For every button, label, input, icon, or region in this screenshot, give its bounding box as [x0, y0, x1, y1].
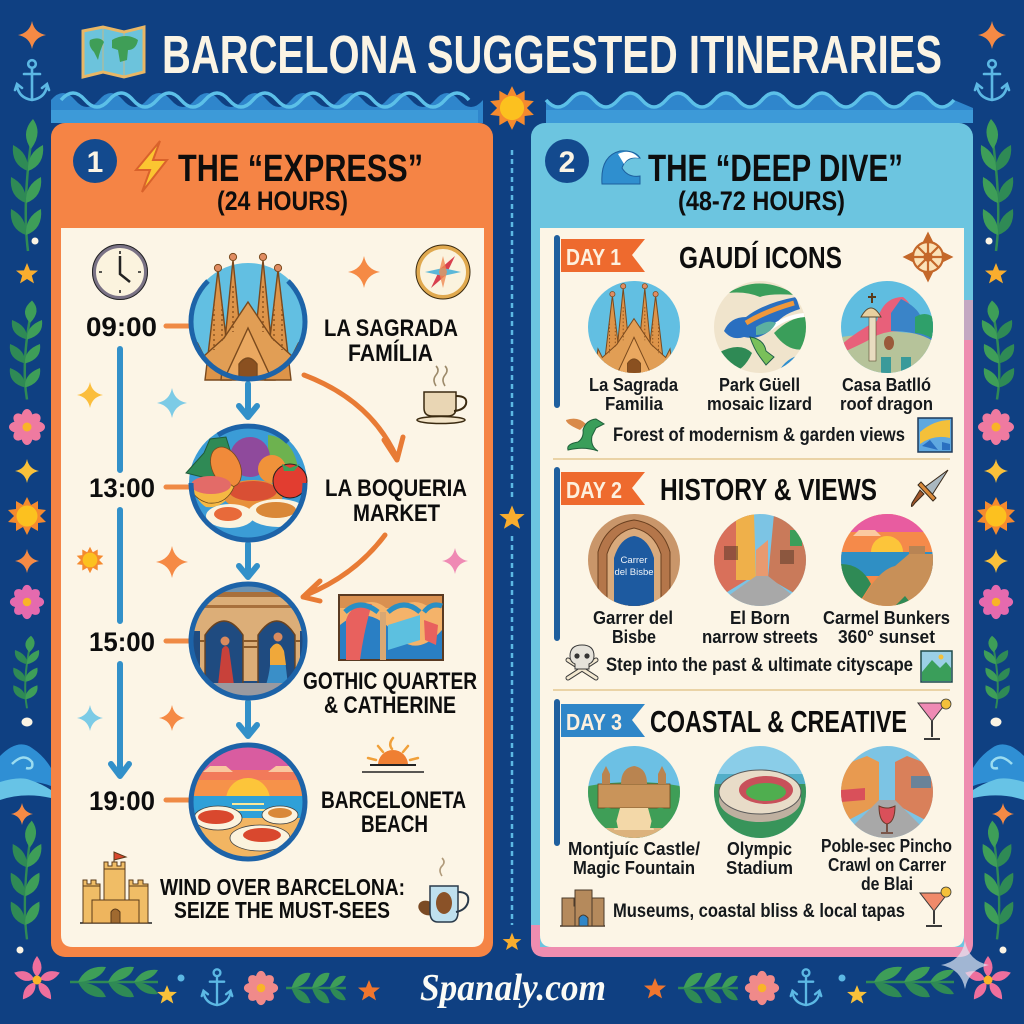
day 3 heading: COASTAL & CREATIVE [650, 704, 907, 739]
day 2 ribbon [561, 472, 645, 505]
icon: clock [92, 244, 148, 300]
casa batllo thumbnail [841, 281, 933, 373]
connector dashes [166, 326, 189, 800]
icon: dagger [911, 470, 948, 506]
day 1 ribbon [561, 239, 645, 272]
badge 1 [73, 139, 117, 183]
day 3 ribbon: DAY 3 [566, 709, 622, 735]
icon: ship wheel [905, 234, 951, 280]
badge 2 [545, 139, 589, 183]
icon: skull and crossbones [568, 645, 596, 678]
day poles [554, 238, 560, 843]
badge 2: 2 [559, 146, 575, 179]
time: 19:00: 19:00 [89, 786, 155, 816]
stop circle: barceloneta beach [188, 742, 308, 862]
label: gothic quarter: GOTHIC QUARTER [303, 668, 477, 695]
day 1 labels: Familia [605, 394, 664, 414]
icon: coffee cup [417, 366, 466, 424]
carrer del bisbe thumbnail [588, 514, 680, 606]
day 3 summary: Museums, coastal bliss & local tapas [613, 901, 905, 922]
left border decorations [0, 21, 51, 954]
day 2 labels: El Born [730, 608, 790, 628]
icon: landscape [921, 651, 952, 682]
day 1 labels: mosaic lizard [707, 394, 812, 414]
badge 1: 1 [87, 146, 103, 179]
day 2 labels: 360° sunset [838, 627, 935, 647]
day 3 labels: de Blai [861, 874, 913, 894]
day 3 labels: Magic Fountain [573, 858, 695, 878]
day 1 labels: roof dragon [840, 394, 933, 414]
wave band right [546, 93, 973, 123]
center dashed divider [511, 150, 513, 925]
label: la boqueria market: MARKET [353, 500, 440, 527]
closing text: wind over barcelona: SEIZE THE MUST-SEES [174, 897, 390, 923]
label: gothic quarter: & CATHERINE [324, 692, 456, 719]
day 3 labels: Olympic [727, 839, 792, 859]
icon: lower center star [503, 933, 521, 950]
orange route arrow 2 [303, 535, 385, 601]
time: 13:00: 13:00 [89, 473, 155, 503]
bottom border decorations right [644, 941, 1012, 1005]
icon: compass [416, 245, 470, 299]
day 2 labels: Garrer del [593, 608, 673, 628]
panel: the express [51, 123, 493, 957]
icon: sandcastle [80, 852, 152, 923]
icon: dragon [566, 419, 604, 451]
day 1 labels: La Sagrada [589, 375, 679, 395]
day 1 heading: GAUDÍ ICONS [679, 240, 842, 275]
label: la boqueria market [325, 475, 467, 527]
carrer del bisbe thumbnail: del Bisbe [614, 567, 654, 578]
panel subheading: 24 hours: (24 HOURS) [217, 186, 348, 216]
label: barceloneta beach [321, 787, 466, 838]
sagrada thumbnail [588, 281, 680, 378]
icon: sunset [362, 738, 424, 772]
day 1 summary: Forest of modernism & garden views [613, 425, 905, 446]
day 2 labels: Bisbe [612, 627, 656, 647]
day 3 labels: Stadium [726, 858, 793, 878]
day 3 labels: Crawl on Carrer [828, 855, 946, 875]
icon: lightning bolt [136, 141, 167, 192]
label: la sagrada familia [324, 315, 458, 367]
day 1 labels: Park Güell [719, 375, 800, 395]
icon: castle [560, 890, 605, 926]
carrer del bisbe thumbnail: Carrer [621, 555, 647, 566]
time: 09:00: 09:00 [86, 312, 157, 342]
carmel bunkers thumbnail [841, 514, 933, 606]
label: gothic quarter [303, 668, 477, 719]
bottom border decorations left [13, 956, 380, 1005]
icon: coffee mug and bean [416, 858, 468, 922]
stop circle: boqueria market [186, 424, 308, 542]
day 2 heading: HISTORY & VIEWS [660, 472, 877, 507]
day 3 labels: Poble-sec Pincho [821, 836, 952, 856]
time: 15:00: 15:00 [89, 627, 155, 657]
band lower strip [51, 110, 973, 123]
poble-sec thumbnail [841, 746, 933, 838]
day dividers [553, 459, 950, 690]
panel heading: the express: THE “EXPRESS” [178, 148, 423, 190]
panel heading: the deep dive: THE “DEEP DIVE” [648, 148, 903, 190]
olympic stadium thumbnail [714, 746, 806, 838]
day 2 labels [593, 608, 950, 647]
icon: cocktail bottom [920, 887, 951, 926]
stop circle: sagrada familia [189, 253, 307, 384]
day 3 labels: Montjuíc Castle/ [568, 839, 700, 859]
label: la sagrada familia: LA SAGRADA [324, 315, 458, 342]
right border decorations [973, 21, 1024, 954]
stop circle: gothic quarter [188, 581, 308, 703]
stop arrows [239, 384, 257, 736]
icon: mosaic tile [918, 418, 952, 452]
decor sparkles [77, 382, 468, 731]
wave highlights [61, 93, 954, 107]
label: la sagrada familia: FAMÍLIA [348, 339, 433, 367]
montjuic thumbnail [588, 746, 680, 838]
day 3 labels [568, 836, 952, 894]
el born thumbnail [714, 514, 806, 606]
day 3 ribbon [561, 704, 645, 737]
icon: orange sparkle [348, 256, 380, 288]
panel: the deep dive [531, 123, 973, 957]
wave band left [51, 93, 483, 123]
closing text: wind over barcelona: WIND OVER BARCELONA: [160, 874, 405, 900]
label: la boqueria market: LA BOQUERIA [325, 475, 467, 502]
timeline vertical arrow [111, 349, 129, 776]
orange route arrow 1 [304, 375, 403, 460]
day 2 labels: narrow streets [702, 627, 818, 647]
brand: spanaly.com: Spanaly.com [420, 967, 606, 1009]
day 2 ribbon: DAY 2 [566, 477, 622, 503]
title band [83, 25, 942, 85]
icon: folded map [83, 27, 144, 77]
day 1 ribbon: DAY 1 [566, 244, 621, 270]
day 1 labels: Casa Batlló [842, 375, 931, 395]
day 2 labels: Carmel Bunkers [823, 608, 950, 628]
icon: cocktail top [918, 699, 951, 739]
icon: sun [490, 86, 534, 130]
closing text: wind over barcelona [160, 874, 405, 923]
icon: ocean wave [602, 151, 640, 184]
day 1 labels [589, 375, 933, 414]
label: barceloneta beach: BEACH [361, 811, 428, 838]
label: barceloneta beach: BARCELONETA [321, 787, 466, 814]
icon: center star [499, 505, 525, 529]
day 2 summary: Step into the past & ultimate cityscape [606, 655, 913, 676]
panel subheading: 48-72 hours: (48-72 HOURS) [678, 186, 845, 216]
park guell lizard thumbnail [714, 281, 806, 373]
mural image [339, 595, 443, 660]
